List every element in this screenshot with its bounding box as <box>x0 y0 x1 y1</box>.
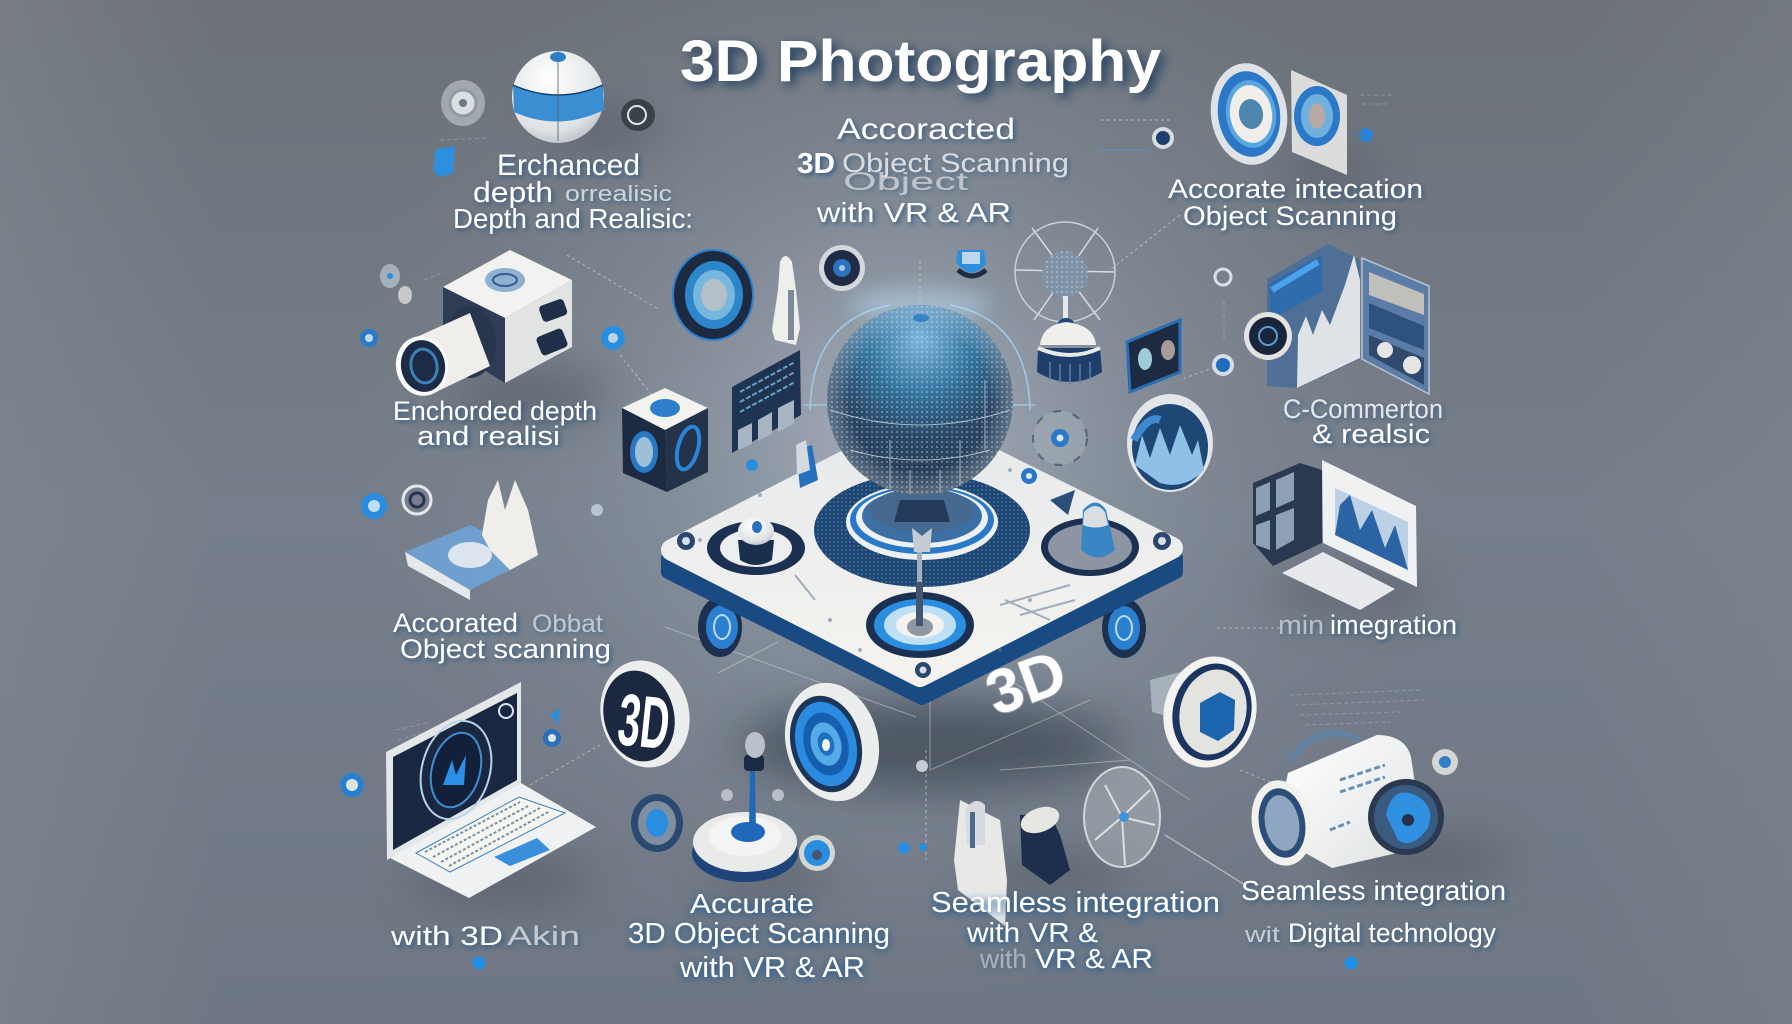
platform side <box>668 558 1176 698</box>
icon: right white camera <box>1245 733 1458 871</box>
platform: rotating 3D scanner stage <box>665 423 1190 800</box>
text: seamless integration with VR and AR: VR & AR <box>1035 943 1153 974</box>
central disc <box>814 473 1030 587</box>
text: accurate 3D object scanning with VR and AR (top): Object <box>843 168 968 196</box>
icon: spiral disc <box>772 672 892 812</box>
text: seamless integration with digital technology: Digital technology <box>1288 918 1496 948</box>
icon: chart bubble <box>1127 394 1213 492</box>
floor lines beneath platform <box>665 627 1190 800</box>
text: enhanced depth and realistic: Depth and Realisic: <box>453 203 693 234</box>
text: accurate object scanning: Object scanning <box>400 634 611 664</box>
text: seamless integration with digital technology: wit <box>1244 922 1280 947</box>
3D floor lettering: 3D <box>977 637 1075 729</box>
bottom disc with stalk <box>866 528 974 658</box>
glowing scan arc around globe <box>804 305 1035 410</box>
text: seamless integration with VR and AR: Seamless integration <box>931 887 1220 919</box>
wheels <box>698 597 1146 658</box>
speckles <box>698 468 1075 652</box>
icon: left laptop <box>340 682 596 898</box>
icon: right shield disc <box>1150 647 1268 777</box>
icon: bottom blue dots <box>472 956 1358 970</box>
left small disc with knob <box>707 517 805 575</box>
icon: small devices and fan <box>954 767 1160 926</box>
text: accurate object scanning: Obbat <box>532 610 603 638</box>
central dotted globe <box>827 305 1013 495</box>
icon: desktop with chart and servers <box>1253 460 1417 610</box>
glow above globe <box>850 289 990 321</box>
text: enhanced depth and realistic: orrealisic <box>565 181 672 206</box>
icon: top-left blue banded ball <box>434 51 655 177</box>
text: accurate 3D object scanning with VR and AR (bottom): with VR & AR <box>679 952 865 984</box>
connector lines <box>530 120 1290 885</box>
icon: left scanner scene <box>361 480 603 600</box>
text: with 3D making: Akin <box>507 921 580 951</box>
text: floating integration label: min <box>1278 610 1324 640</box>
text: e-commerce and realistic <box>1283 394 1443 449</box>
faint data scribbles <box>396 95 1425 740</box>
icon: joystick stand <box>692 732 835 882</box>
text: accurate integration object scanning <box>1168 174 1423 231</box>
text: enhanced depth and realism: and realisi <box>417 421 560 451</box>
text: accurate 3D object scanning with VR and AR (top): Accoracted <box>837 113 1015 146</box>
text: accurate 3D object scanning with VR and AR (bottom) <box>628 888 890 984</box>
title: 3D Photography <box>680 29 1161 94</box>
text: enhanced depth and realistic: depth <box>473 177 553 209</box>
text: enhanced depth and realism <box>393 396 597 451</box>
icon: antenna globe <box>1015 222 1115 384</box>
icon: blue widget <box>956 250 986 276</box>
icon: blue lens ring <box>673 250 753 340</box>
text: enhanced depth and realism: Enchorded depth <box>393 396 597 426</box>
icon: data panel <box>732 350 801 453</box>
text: accurate integration object scanning: Accorate intecation <box>1168 174 1423 204</box>
text: seamless integration with VR and AR: with <box>979 944 1027 974</box>
soft shadows under objects <box>410 110 1510 904</box>
text: seamless integration with VR and AR: with VR & <box>966 917 1098 948</box>
icon: brochure panels <box>1212 244 1429 394</box>
icon: small spoked wheel <box>1033 411 1087 465</box>
text: with 3D making: with 3D <box>390 921 503 951</box>
text: e-commerce and realistic: & realsic <box>1312 419 1430 449</box>
icon: small connector dot left <box>746 459 758 471</box>
text: accurate 3D object scanning with VR and AR (bottom): 3D Object Scanning <box>628 918 890 950</box>
icon: left box camera <box>360 250 625 400</box>
right small disc with knob <box>1041 502 1139 576</box>
platform top <box>672 423 1172 676</box>
text: accurate integration object scanning: Object Scanning <box>1183 201 1397 231</box>
text: accurate 3D object scanning with VR and AR (top) <box>797 113 1069 228</box>
icon: concentric ring and paper card <box>1100 58 1373 175</box>
text: with 3D making <box>390 921 580 951</box>
text: seamless integration with digital technology <box>1241 875 1506 948</box>
icon: 3D lens disc <box>589 651 701 777</box>
text: accurate 3D object scanning with VR and AR (top): Object Scanning <box>842 148 1069 178</box>
text: accurate 3D object scanning with VR and AR (top): 3D <box>797 148 835 180</box>
text: accurate object scanning: Accorated <box>393 608 518 638</box>
icon: white pillar <box>772 256 800 345</box>
text: enhanced depth and realistic <box>453 149 693 234</box>
text: accurate 3D object scanning with VR and AR (top): with VR & AR <box>816 197 1011 228</box>
corner rivets <box>677 440 1171 678</box>
text: accurate object scanning <box>393 608 611 664</box>
text: enhanced depth and realistic: Erchanced <box>497 149 640 182</box>
text: seamless integration with VR and AR <box>931 887 1220 974</box>
icon: small blue disc <box>631 794 683 852</box>
icon: blue dots column <box>898 760 928 854</box>
text: seamless integration with digital technology: Seamless integration <box>1241 875 1506 906</box>
text: floating integration label: imegration <box>1330 610 1457 640</box>
text: accurate 3D object scanning with VR and AR (bottom): Accurate <box>690 888 814 919</box>
icon: cube <box>622 388 708 492</box>
icon: tilted blue square <box>1127 320 1180 392</box>
icon: 3D lens disc: 3D <box>614 677 674 765</box>
icon: small lens <box>819 245 865 291</box>
text: e-commerce and realistic: C-Commerton <box>1283 394 1443 424</box>
